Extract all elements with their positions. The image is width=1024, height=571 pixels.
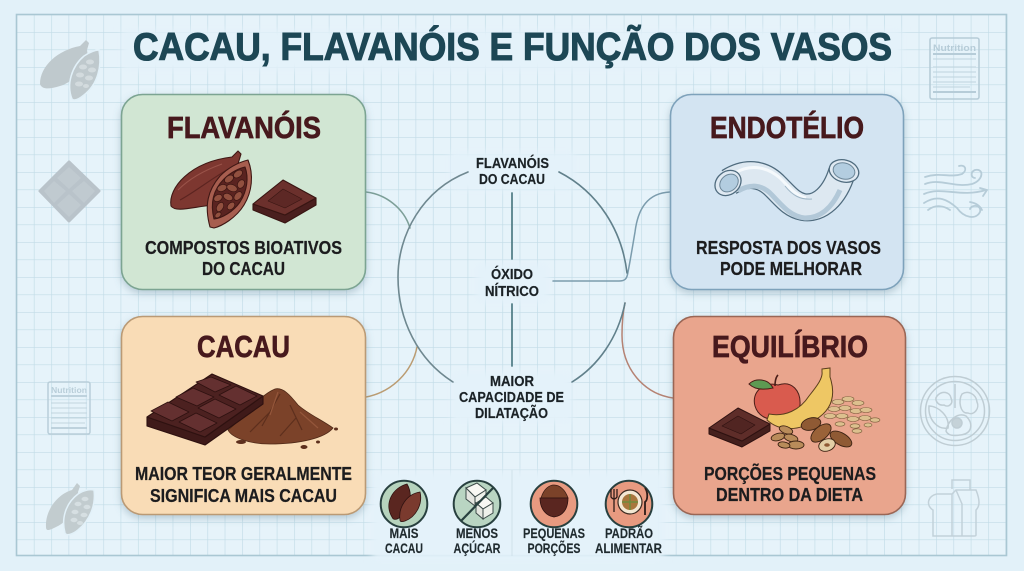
label: flavanóis do cacau: FLAVANÓIS xyxy=(476,154,549,172)
label: maior capacidade de dilatação: MAIOR xyxy=(490,374,534,390)
text: resposta dos vasos pode melhorar xyxy=(696,238,881,279)
heading: flavanóis: FLAVANÓIS xyxy=(167,109,321,145)
background icon: nutrition label top right xyxy=(930,38,979,99)
heading: endotélio: ENDOTÉLIO xyxy=(710,110,864,145)
background icon: nutrition label left xyxy=(48,382,90,434)
icon: banana xyxy=(767,368,833,429)
text: compostos bioativos do cacau: DO CACAU xyxy=(202,259,285,279)
label: flavanóis do cacau xyxy=(476,154,549,188)
legend item: menos açúcar: AÇÚCAR xyxy=(454,541,501,556)
icon: oats xyxy=(824,396,880,433)
connector: equilíbrio to circle xyxy=(622,303,673,398)
icon: nuts xyxy=(770,416,854,454)
background icon: nutrition label left: Nutrition xyxy=(51,386,87,395)
panel: equilíbrio xyxy=(674,316,906,514)
panel: endotélio xyxy=(670,94,904,290)
central cycle arcs xyxy=(398,172,627,382)
legend item: padrão alimentar xyxy=(595,481,662,556)
legend item: pequenas porções: PEQUENAS xyxy=(523,526,585,541)
label: maior capacidade de dilatação xyxy=(459,374,564,422)
legend item: padrão alimentar: PADRÃO xyxy=(605,526,653,541)
text: porções pequenas dentro da dieta: PORÇÕES PEQUENAS xyxy=(704,463,876,484)
title: CACAU, FLAVANÓIS E FUNÇÃO DOS VASOS xyxy=(133,25,892,69)
legend item: menos açúcar: MENOS xyxy=(456,526,498,541)
icon: apple xyxy=(749,375,800,419)
icon: chocolate piece xyxy=(709,408,770,447)
label: óxido nítrico: ÓXIDO xyxy=(491,265,533,283)
text: maior teor geralmente significa mais cacau xyxy=(135,464,352,506)
background icon: cocoa pod top left xyxy=(40,40,100,100)
panel: flavanóis xyxy=(122,94,366,290)
legend item: mais cacau xyxy=(381,481,427,556)
legend item: mais cacau: CACAU xyxy=(385,541,423,556)
background icon: plate xyxy=(920,376,990,446)
background icon: airflow xyxy=(924,166,987,217)
heading: cacau: CACAU xyxy=(197,329,290,364)
legend item: pequenas porções: PORÇÕES xyxy=(528,541,580,556)
connector: cacau to circle xyxy=(366,347,417,397)
legend xyxy=(381,470,662,556)
icon: cocoa pods xyxy=(171,151,251,228)
label: maior capacidade de dilatação: DILATAÇÃO xyxy=(475,404,548,422)
label: maior capacidade de dilatação: CAPACIDADE DE xyxy=(459,390,564,406)
icon: cocoa powder pile xyxy=(228,389,338,449)
text: compostos bioativos do cacau: COMPOSTOS BIOATIVOS xyxy=(145,238,342,258)
text: resposta dos vasos pode melhorar: RESPOSTA DOS VASOS xyxy=(696,238,881,258)
icon: chocolate bar xyxy=(147,374,263,445)
legend item: pequenas porções xyxy=(523,481,585,556)
label: óxido nítrico: NÍTRICO xyxy=(485,283,539,300)
heading: equilíbrio: EQUILÍBRIO xyxy=(712,329,868,364)
text: resposta dos vasos pode melhorar: PODE MELHORAR xyxy=(720,259,862,279)
text: maior teor geralmente significa mais cacau: MAIOR TEOR GERALMENTE xyxy=(135,464,352,484)
legend item: padrão alimentar: ALIMENTAR xyxy=(595,541,662,556)
connector: endotélio to óxido nítrico xyxy=(553,192,670,281)
background icon: cocoa pod bottom left xyxy=(46,483,94,535)
label: flavanóis do cacau: DO CACAU xyxy=(479,172,545,188)
icon: blood vessel tube xyxy=(710,156,861,218)
text: porções pequenas dentro da dieta: DENTRO DA DIETA xyxy=(716,485,863,505)
background icon: bread and milk xyxy=(928,480,979,536)
icon: chocolate piece xyxy=(253,180,316,223)
text: porções pequenas dentro da dieta xyxy=(704,463,876,505)
panel: cacau xyxy=(122,316,366,514)
background icon: nutrition label top right: Nutrition xyxy=(933,43,976,54)
text: maior teor geralmente significa mais cacau: SIGNIFICA MAIS CACAU xyxy=(150,486,337,506)
background icon: chocolate square xyxy=(40,162,99,221)
text: compostos bioativos do cacau xyxy=(145,238,342,279)
legend item: menos açúcar xyxy=(454,481,501,556)
legend item: mais cacau: MAIS xyxy=(390,526,418,541)
connector: flavanóis to circle xyxy=(366,192,410,228)
label: óxido nítrico xyxy=(485,265,539,300)
